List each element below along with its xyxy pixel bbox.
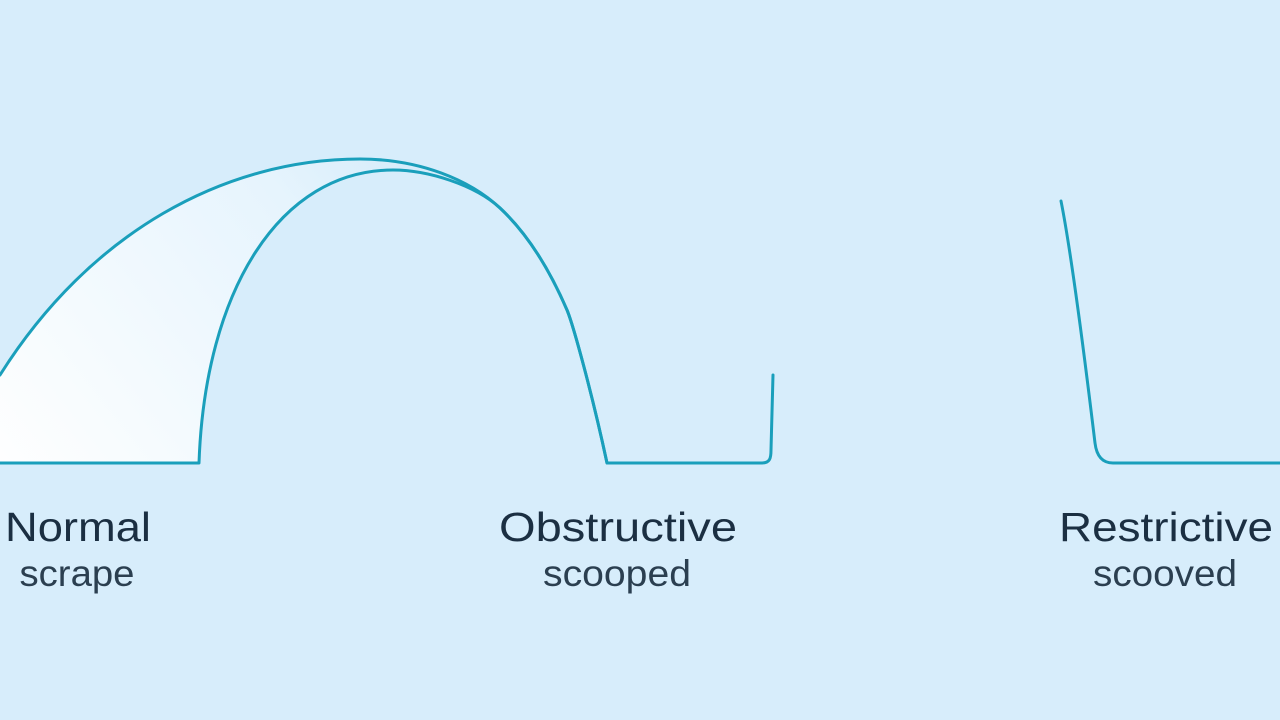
curve: restrictive (1061, 201, 1280, 463)
label: obstructive (499, 504, 737, 594)
label: restrictive: Restrictive (1059, 504, 1273, 550)
curve: obstructive (0, 170, 773, 463)
label: restrictive: scooved (1093, 553, 1237, 594)
label: normal (5, 504, 151, 594)
label: normal: scrape (20, 553, 134, 594)
label: obstructive: scooped (543, 553, 691, 594)
shaded area between normal and obstructive curves (0, 159, 400, 463)
label: restrictive (1059, 504, 1273, 594)
label: obstructive: Obstructive (499, 504, 737, 550)
curve: normal (0, 159, 607, 463)
label: normal: Normal (5, 504, 151, 550)
